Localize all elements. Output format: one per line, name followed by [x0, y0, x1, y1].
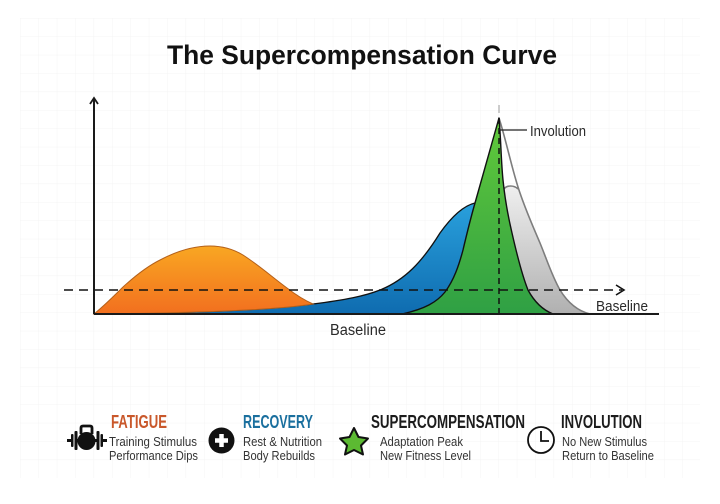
text: supercompensation description: Adaptation Peak [380, 434, 463, 449]
icon: clock [528, 427, 554, 453]
legend: supercompensation [340, 412, 525, 463]
text: recovery description: Body Rebuilds [243, 448, 315, 463]
text: involution description: Return to Baseline [562, 448, 654, 463]
curve: fatigue (orange) [94, 246, 313, 314]
icon: plus circle [208, 428, 234, 454]
label: baseline right: Baseline [596, 298, 648, 315]
legend: fatigue [67, 412, 198, 463]
title: The Supercompensation Curve [167, 40, 557, 70]
involution fill [504, 186, 590, 314]
legend: involution [528, 412, 654, 463]
heading: fatigue: FATIGUE [111, 412, 167, 432]
legend: recovery [208, 412, 322, 463]
text: fatigue description: Training Stimulus [109, 434, 197, 449]
baseline dashed arrow [64, 285, 624, 295]
curve: recovery (blue) [94, 203, 475, 314]
axes [90, 98, 659, 314]
curve: supercompensation (green) [402, 118, 553, 314]
heading: involution: INVOLUTION [561, 412, 642, 432]
involution outlines [499, 118, 590, 314]
chart: supercompensation curve [64, 98, 659, 339]
text: supercompensation description: New Fitness Level [380, 448, 471, 463]
icon: kettlebell dumbbell [67, 426, 107, 450]
text: recovery description [243, 434, 322, 463]
involution pointer [499, 129, 527, 131]
text: involution description: No New Stimulus [562, 434, 647, 449]
curve: involution (gray) [499, 118, 590, 314]
label: baseline center: Baseline [330, 322, 386, 339]
label: involution: Involution [530, 124, 586, 140]
text: fatigue description [109, 434, 198, 463]
heading: supercompensation: SUPERCOMPENSATION [371, 412, 525, 432]
heading: recovery: RECOVERY [243, 412, 313, 432]
icon: star [340, 428, 368, 454]
text: fatigue description: Performance Dips [109, 448, 198, 463]
peak dashed marker [498, 105, 500, 313]
text: recovery description: Rest & Nutrition [243, 434, 322, 449]
text: involution description [562, 434, 654, 463]
text: supercompensation description [380, 434, 471, 463]
